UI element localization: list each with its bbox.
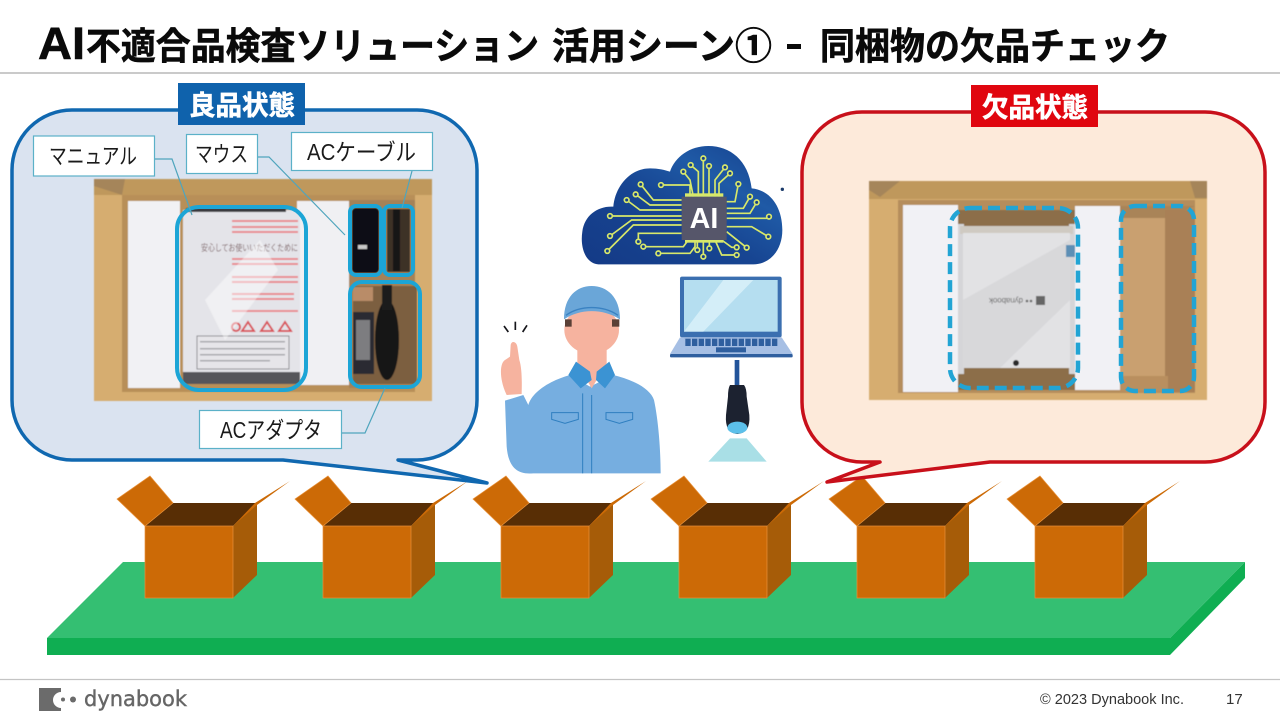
callouts: cyan outlines around items xyxy=(177,206,420,390)
logo: dynabook xyxy=(39,687,188,711)
callouts: dashed outlines for missing items xyxy=(950,206,1194,391)
icon: AI cloud with circuit xyxy=(582,146,784,264)
label: manual: マニュアル xyxy=(49,144,137,169)
photo: box with missing contents: dynabook xyxy=(988,296,1023,305)
panel: good state speech bubble xyxy=(12,83,487,483)
conveyor belt xyxy=(47,562,1245,655)
photo: box with missing contents xyxy=(869,181,1207,400)
label: manual xyxy=(34,136,192,215)
panel: missing item state speech bubble xyxy=(802,85,1265,482)
icon: laptop xyxy=(670,277,793,357)
label: AC adapter: ACアダプタ xyxy=(220,417,322,443)
heading: missing state xyxy=(971,85,1098,127)
photo: box with all contents xyxy=(94,179,432,401)
footer: copyright: © 2023 Dynabook Inc. xyxy=(1040,691,1184,708)
label: AC cable xyxy=(292,132,432,208)
label: mouse: マウス xyxy=(195,142,248,167)
heading: good state xyxy=(178,83,305,125)
heading: good state: 良品状態 xyxy=(189,91,295,121)
title: 同梱物の欠品チェック xyxy=(820,26,1170,67)
title: 不適合品検査ソリューション xyxy=(86,26,539,67)
logo: dynabook: dynabook xyxy=(84,687,188,711)
footer: page number: 17 xyxy=(1226,691,1243,708)
title xyxy=(38,18,1170,69)
label: AC adapter xyxy=(200,388,385,448)
heading: missing state: 欠品状態 xyxy=(982,93,1088,123)
label: AC cable: ACケーブル xyxy=(307,139,416,165)
title: 活用シーン① xyxy=(552,26,772,67)
icon: AI cloud with circuit: AI xyxy=(690,203,718,235)
icon: camera with light cone xyxy=(708,360,767,462)
icon: worker pointing up xyxy=(501,286,661,474)
title: AI xyxy=(38,18,85,69)
photo: box with all contents: 安心してお使いいただくために xyxy=(201,242,298,253)
cardboard boxes on the belt xyxy=(117,476,1180,598)
label: mouse xyxy=(186,134,345,235)
illustration group in zoom coordinates xyxy=(501,146,793,474)
